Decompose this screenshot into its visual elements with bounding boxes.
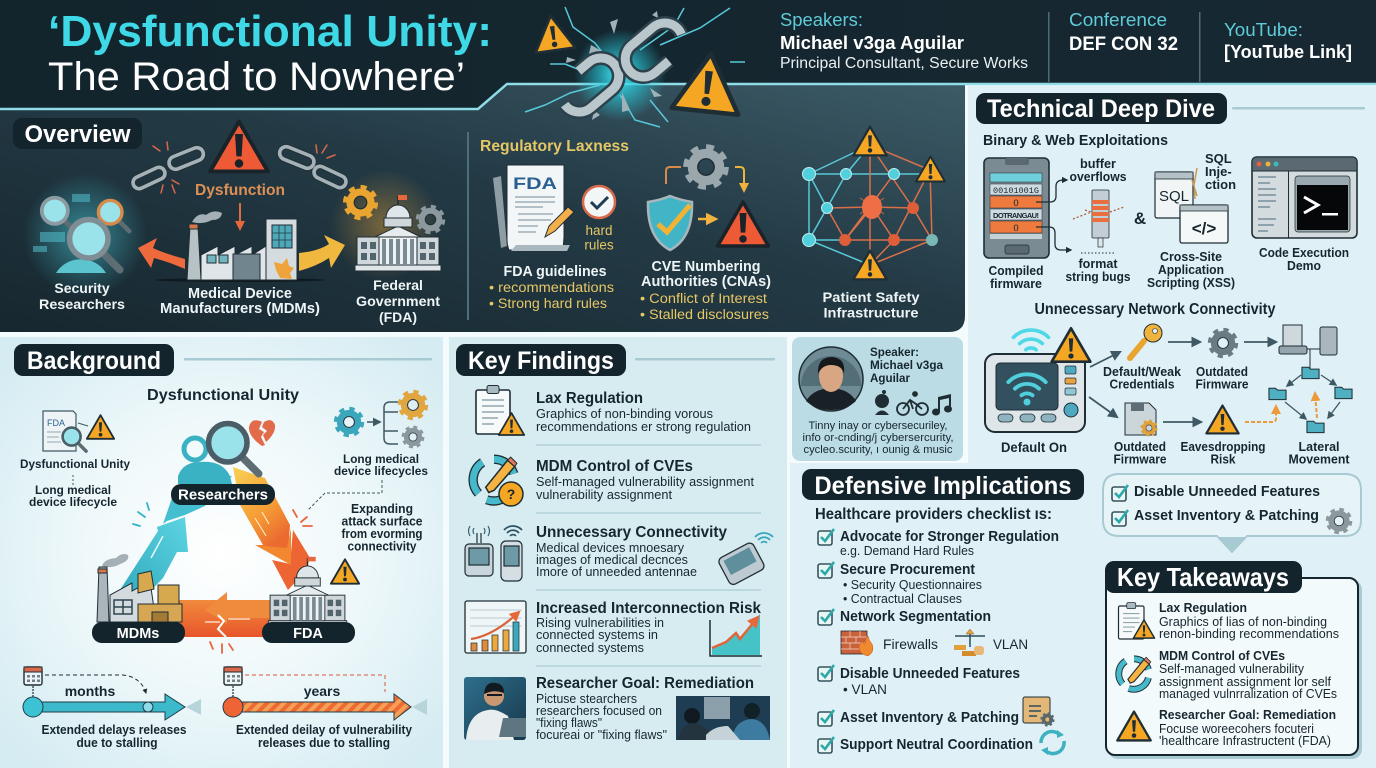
label: federal government: (FDA) xyxy=(379,309,417,325)
finding: unnecessary connectivity: Unnecessary Connectivity xyxy=(536,524,727,541)
text: speaker name: Speaker: xyxy=(870,345,919,359)
text: speaker bio: info or-cnding/j cybersercurity, xyxy=(802,432,954,444)
text: expanding attack surface: from evorming xyxy=(342,527,422,541)
icon: FDA document xyxy=(493,165,574,251)
pill: MDMs: MDMs xyxy=(117,626,159,642)
finding: unnecessary connectivity xyxy=(465,524,772,586)
icon: firmware device: DOTRANGAU! xyxy=(993,211,1039,220)
finding: interconnection risk xyxy=(465,600,762,656)
arrow: dysfunction down xyxy=(239,203,241,229)
finding: interconnection risk: Increased Interconnection Risk xyxy=(536,600,761,617)
takeaway: lax regulation: Graphics of lias of non-binding xyxy=(1159,615,1327,629)
takeaway: MDM control: managed vulnrralization of CVEs xyxy=(1159,687,1337,701)
label: firmware: Compiled xyxy=(988,263,1044,278)
label: outdated firmware 2: Firmware xyxy=(1114,452,1167,466)
subheading: dysfunctional unity: Dysfunctional Unity xyxy=(147,387,299,404)
text: FDA guidelines xyxy=(489,264,614,311)
icon: cycling hobby xyxy=(897,392,928,415)
text: speaker bio: cycleo.scurity, ı ounig & music xyxy=(804,444,953,456)
text: speaker name: Aguilar xyxy=(870,371,910,385)
icon: broken heart xyxy=(249,420,275,446)
text: CNAs: CVE Numbering xyxy=(652,259,760,275)
checklist xyxy=(818,528,1059,753)
info: speakers: Speakers: xyxy=(780,10,863,30)
icon: code execution demo xyxy=(1252,157,1357,238)
arrow: yellow to FDA xyxy=(299,235,345,271)
text: speaker name: Michael v3ga xyxy=(870,358,943,372)
icon: music hobby xyxy=(932,394,952,416)
pill: FDA: FDA xyxy=(293,626,323,642)
icon: key xyxy=(1130,324,1162,358)
finding: interconnection risk: Rising vulnerabilities in xyxy=(536,615,664,630)
label: security researchers: Researchers xyxy=(39,296,125,312)
text: dysfunctional unity note xyxy=(20,457,130,509)
picture: two researchers xyxy=(676,696,770,740)
text: expanding attack surface: attack surface xyxy=(342,514,423,528)
text: dysfunctional unity note: Long medical xyxy=(35,483,111,497)
finding: lax regulation: Graphics of non-binding vorous xyxy=(536,406,713,421)
label: default on: Default On xyxy=(1001,439,1067,455)
label: SQL injection: SQL xyxy=(1205,151,1232,166)
callout: disable and inventory: Asset Inventory & Patching xyxy=(1134,507,1319,524)
info: speakers: Michael v3ga Aguilar xyxy=(780,32,964,53)
takeaway: researcher goal: Researcher Goal: Remediation xyxy=(1159,708,1336,722)
checklist: Asset Inventory & Patching xyxy=(840,709,1019,726)
icon: FDA doc with magnifier xyxy=(43,411,114,451)
checklist: Network Segmentation xyxy=(840,608,991,625)
icon: firmware device: 0 xyxy=(1013,198,1019,209)
finding: MDM control xyxy=(473,457,754,506)
finding: lax regulation: recommendations er strong regulation xyxy=(536,419,751,434)
label: SQL injection: ction xyxy=(1205,177,1236,192)
text: FDA guidelines: • recommendations xyxy=(489,280,614,295)
icon: network machines xyxy=(1279,325,1337,369)
checklist: e.g. Demand Hard Rules xyxy=(840,543,974,558)
icon: brain hobby xyxy=(875,390,889,415)
pill: FDA xyxy=(262,622,355,643)
icon: broken chain right xyxy=(278,145,348,190)
takeaway: MDM control: assignment assignment lor self xyxy=(1159,675,1332,689)
takeaway: MDM control xyxy=(1119,649,1337,701)
label: dysfunction: Dysfunction xyxy=(195,182,285,199)
icon: SQL window: SQL xyxy=(1159,188,1189,205)
checklist: Secure Procurement xyxy=(840,561,975,578)
takeaway: researcher goal: Focuse woreecohers focuteri xyxy=(1159,722,1314,736)
icon: red warning xyxy=(210,122,268,171)
info: youtube xyxy=(1224,20,1352,62)
callout: disable and inventory xyxy=(1103,474,1361,552)
label: medical device manufacturers: Manufacturers (MDMs) xyxy=(160,301,320,317)
icon: warning xyxy=(1052,328,1090,362)
icon: wifi xyxy=(1013,330,1049,350)
timeline: years xyxy=(223,667,427,750)
takeaway: lax regulation xyxy=(1118,601,1339,641)
text: CNAs xyxy=(640,259,771,322)
label: patient safety infrastructure: Patient Safety xyxy=(822,289,920,305)
text: speaker bio: Tinny inay or cybersecuriley, xyxy=(808,420,948,432)
icon: memory stack xyxy=(1073,190,1124,247)
diagram: lateral movement xyxy=(1245,367,1352,433)
text: FDA guidelines: FDA guidelines xyxy=(504,264,606,280)
finding: unnecessary connectivity: images of medical decnces xyxy=(536,552,688,567)
label: cross-site: Scripting (XSS) xyxy=(1147,275,1235,290)
icon: firmware device xyxy=(984,158,1049,258)
finding: researcher goal: Pictuse stearchers xyxy=(536,691,637,706)
label: buffer overflows: overflows xyxy=(1070,169,1126,184)
label: federal government: Federal xyxy=(373,277,423,293)
label: firewalls: Firewalls xyxy=(883,636,938,652)
icon: floppy with gear xyxy=(1125,403,1156,435)
timeline: months xyxy=(23,667,201,750)
timeline: years: releases due to stalling xyxy=(258,736,390,750)
icon: lifecycle gears xyxy=(336,392,426,447)
text: long lifecycles: Long medical xyxy=(343,452,419,466)
pill: researchers: Researchers xyxy=(178,488,268,504)
finding: MDM control: MDM Control of CVEs xyxy=(536,458,693,475)
checklist: • Contractual Clauses xyxy=(843,591,962,606)
text: expanding attack surface: connectivity xyxy=(348,540,417,554)
icon: firewall xyxy=(841,631,873,656)
takeaway: MDM control: Self-managed vulnerability xyxy=(1159,662,1305,676)
icon: broken gear xyxy=(1210,330,1236,356)
picture: researcher at laptop xyxy=(464,677,526,740)
panel: defensive implications background xyxy=(790,463,1376,768)
icon: check circle xyxy=(583,186,615,218)
icon: large warning xyxy=(672,50,744,115)
heading: key findings: Key Findings xyxy=(468,347,614,375)
icon: warning xyxy=(331,559,359,584)
label: cross-site: Application xyxy=(1158,262,1224,277)
checklist: Advocate for Stronger Regulation xyxy=(840,528,1059,545)
title: The Road to Nowhere’ xyxy=(48,55,465,99)
diagram: patient safety network xyxy=(802,127,945,279)
finding: interconnection risk: connected systems xyxy=(536,640,644,655)
finding: MDM control: vulnerability assignment xyxy=(536,487,672,502)
icon: sync xyxy=(1041,730,1064,755)
heading: overview: Overview xyxy=(24,121,131,148)
text: CNAs: • Stalled disclosures xyxy=(640,307,769,322)
text: CNAs: Authorities (CNAs) xyxy=(641,274,771,290)
network flow arrows xyxy=(1089,342,1276,422)
icon: broken chain left xyxy=(131,142,205,193)
finding: MDM control: Self-managed vulnerability assignment xyxy=(536,474,754,489)
info: speakers: Principal Consultant, Secure Works xyxy=(780,55,1028,72)
icon: inventory box xyxy=(1023,697,1054,726)
label: eavesdropping risk: Risk xyxy=(1210,452,1236,466)
info: conference xyxy=(1069,10,1178,55)
checklist: Disable Unneeded Features xyxy=(840,665,1020,682)
label: patient safety infrastructure: Infrastructure xyxy=(824,304,919,320)
heading: regulatory laxness: Regulatory Laxness xyxy=(480,138,629,155)
label: VLAN: VLAN xyxy=(993,636,1028,652)
takeaway: researcher goal xyxy=(1117,708,1336,748)
heading: technical deep dive: Technical Deep Dive xyxy=(987,95,1215,123)
finding: interconnection risk: connected systems in xyxy=(536,627,658,642)
heading: key takeaways: Key Takeaways xyxy=(1117,562,1289,592)
timeline: months: months xyxy=(65,683,115,699)
icon: small warning xyxy=(531,13,575,53)
pill: researchers xyxy=(171,484,275,505)
info: conference: Conference xyxy=(1069,10,1167,30)
icon: cracks xyxy=(133,503,312,653)
label: lateral movement: Lateral xyxy=(1298,440,1340,454)
label: hard rules: rules xyxy=(584,238,614,252)
label: code execution demo: Demo xyxy=(1287,258,1321,273)
label: security researchers: Security xyxy=(54,280,110,296)
title xyxy=(48,7,492,99)
text: dysfunctional unity note: device lifecycle xyxy=(29,495,117,509)
label: outdated firmware: Outdated xyxy=(1196,365,1248,379)
finding: unnecessary connectivity: Medical devices mnoesary xyxy=(536,540,684,555)
label: SQL injection: Inje- xyxy=(1205,164,1232,179)
takeaway: MDM control: MDM Control of CVEs xyxy=(1159,649,1285,663)
text: expanding attack surface: Expanding xyxy=(351,502,413,516)
icon: factory xyxy=(155,211,325,282)
label: code execution demo: Code Execution xyxy=(1259,245,1349,260)
finding: researcher goal xyxy=(464,675,770,742)
icon: researchers xyxy=(178,424,259,484)
finding: unnecessary connectivity: Imore of unneeded antennae xyxy=(536,564,697,579)
icon: factory xyxy=(97,554,182,622)
panel: overview xyxy=(0,84,965,332)
group: federal government xyxy=(330,170,443,280)
label: lateral movement: Movement xyxy=(1288,452,1350,466)
arrow: researchers to FDA xyxy=(233,467,290,550)
icon: broken chain burst xyxy=(525,7,745,127)
panel: background xyxy=(0,337,443,768)
checklist: • Security Questionnaires xyxy=(843,577,982,592)
heading: defensive implications: Defensive Implications xyxy=(814,472,1072,500)
icon: firmware device: 00101001G xyxy=(993,186,1039,196)
icon: eavesdropping warning xyxy=(1206,406,1239,433)
connector: dashed xyxy=(308,480,382,510)
icon: SQL window xyxy=(1155,168,1197,218)
info: speakers xyxy=(780,10,1028,72)
heading: background: Background xyxy=(27,347,161,375)
label: credentials: Default/Weak xyxy=(1103,365,1181,379)
label: cross-site: Cross-Site xyxy=(1160,249,1222,264)
label: medical device manufacturers: Medical Device xyxy=(188,286,292,302)
icon: CNA gear cycle xyxy=(648,148,768,250)
arrows: firmware to bugs xyxy=(1036,180,1071,250)
finding: lax regulation xyxy=(476,386,751,435)
diagram: dysfunction triangle xyxy=(120,467,310,637)
icon: FDA capitol xyxy=(268,557,347,626)
icon: firmware device: 0 xyxy=(1013,223,1019,234)
photo: speaker portrait xyxy=(799,347,863,411)
panel: speaker xyxy=(792,337,963,461)
timeline: years: Extended deilay of vulnerability xyxy=(236,723,412,737)
arrow: orange to researchers xyxy=(138,238,185,269)
callout: disable and inventory: Disable Unneeded Features xyxy=(1134,483,1320,500)
label: outdated firmware 2: Outdated xyxy=(1114,440,1166,454)
title: ‘Dysfunctional Unity: xyxy=(48,7,492,56)
takeaway: researcher goal: 'healthcare Infrastructent (FDA) xyxy=(1159,734,1331,748)
finding: researcher goal: focureai or "fixing flaws" xyxy=(536,727,667,742)
text: CNAs: • Conflict of Interest xyxy=(640,291,767,306)
timeline: years: years xyxy=(304,683,341,699)
header band xyxy=(0,0,1376,127)
subheading: binary web: Binary & Web Exploitations xyxy=(983,132,1168,149)
label: buffer overflows: buffer xyxy=(1080,156,1116,171)
timeline: months: due to stalling xyxy=(76,736,158,750)
panel: defensive implications xyxy=(802,469,1084,755)
pill: MDMs xyxy=(92,622,185,643)
icon: connected device xyxy=(985,354,1085,432)
icon: FDA doc with magnifier: FDA xyxy=(47,418,65,428)
takeaway: lax regulation: renon-binding recommendations xyxy=(1159,627,1339,641)
label: format string bugs: format xyxy=(1078,256,1118,271)
info: conference: DEF CON 32 xyxy=(1069,34,1178,55)
label: outdated firmware: Firmware xyxy=(1196,378,1249,392)
info: youtube: YouTube: xyxy=(1224,20,1303,40)
label: eavesdropping risk: Eavesdropping xyxy=(1180,440,1266,454)
text: FDA guidelines: • Strong hard rules xyxy=(489,296,607,311)
timeline: months: Extended delays releases xyxy=(42,723,187,737)
finding: researcher goal: "fixing flaws" xyxy=(536,715,602,730)
icon: code window: </> xyxy=(1192,219,1216,238)
text: dysfunctional unity note: Dysfunctional Unity xyxy=(20,457,130,471)
icon: code window xyxy=(1180,205,1228,243)
label: credentials: Credentials xyxy=(1110,378,1175,392)
finding: researcher goal: Researcher Goal: Remediation xyxy=(536,675,754,692)
text: long lifecycles: device lifecycles xyxy=(334,464,428,478)
group: researchers xyxy=(23,173,147,297)
arrow: FDA to MDMs xyxy=(178,600,270,637)
label: ampersand: & xyxy=(1134,209,1146,228)
icon: VLAN xyxy=(954,629,985,656)
takeaway: lax regulation: Lax Regulation xyxy=(1159,601,1247,615)
panel: technical deep dive background xyxy=(968,86,1376,768)
label: format string bugs xyxy=(1066,253,1130,284)
label: format string bugs: string bugs xyxy=(1066,269,1130,284)
subheading: network connectivity: Unnecessary Network Connectivity xyxy=(1034,301,1276,318)
icon: FDA document: FDA xyxy=(513,174,557,193)
label: hard rules: hard xyxy=(585,223,613,238)
info: youtube: [YouTube Link] xyxy=(1224,42,1352,62)
checklist: • VLAN xyxy=(843,681,887,697)
checklist: Support Neutral Coordination xyxy=(840,736,1033,753)
finding: researcher goal: researchers focused on xyxy=(536,703,662,718)
panel: key takeaways xyxy=(1105,561,1362,759)
panel: technical deep dive xyxy=(976,93,1365,466)
subheading: checklist: Healthcare providers checklist ıs: xyxy=(815,506,1052,523)
panel: key findings xyxy=(449,337,787,768)
arrow: MDMs to researchers xyxy=(120,517,188,602)
label: firmware: firmware xyxy=(990,276,1042,291)
finding: lax regulation: Lax Regulation xyxy=(536,390,643,407)
finding: MDM control: ? xyxy=(507,486,515,502)
label: federal government: Government xyxy=(356,293,440,309)
